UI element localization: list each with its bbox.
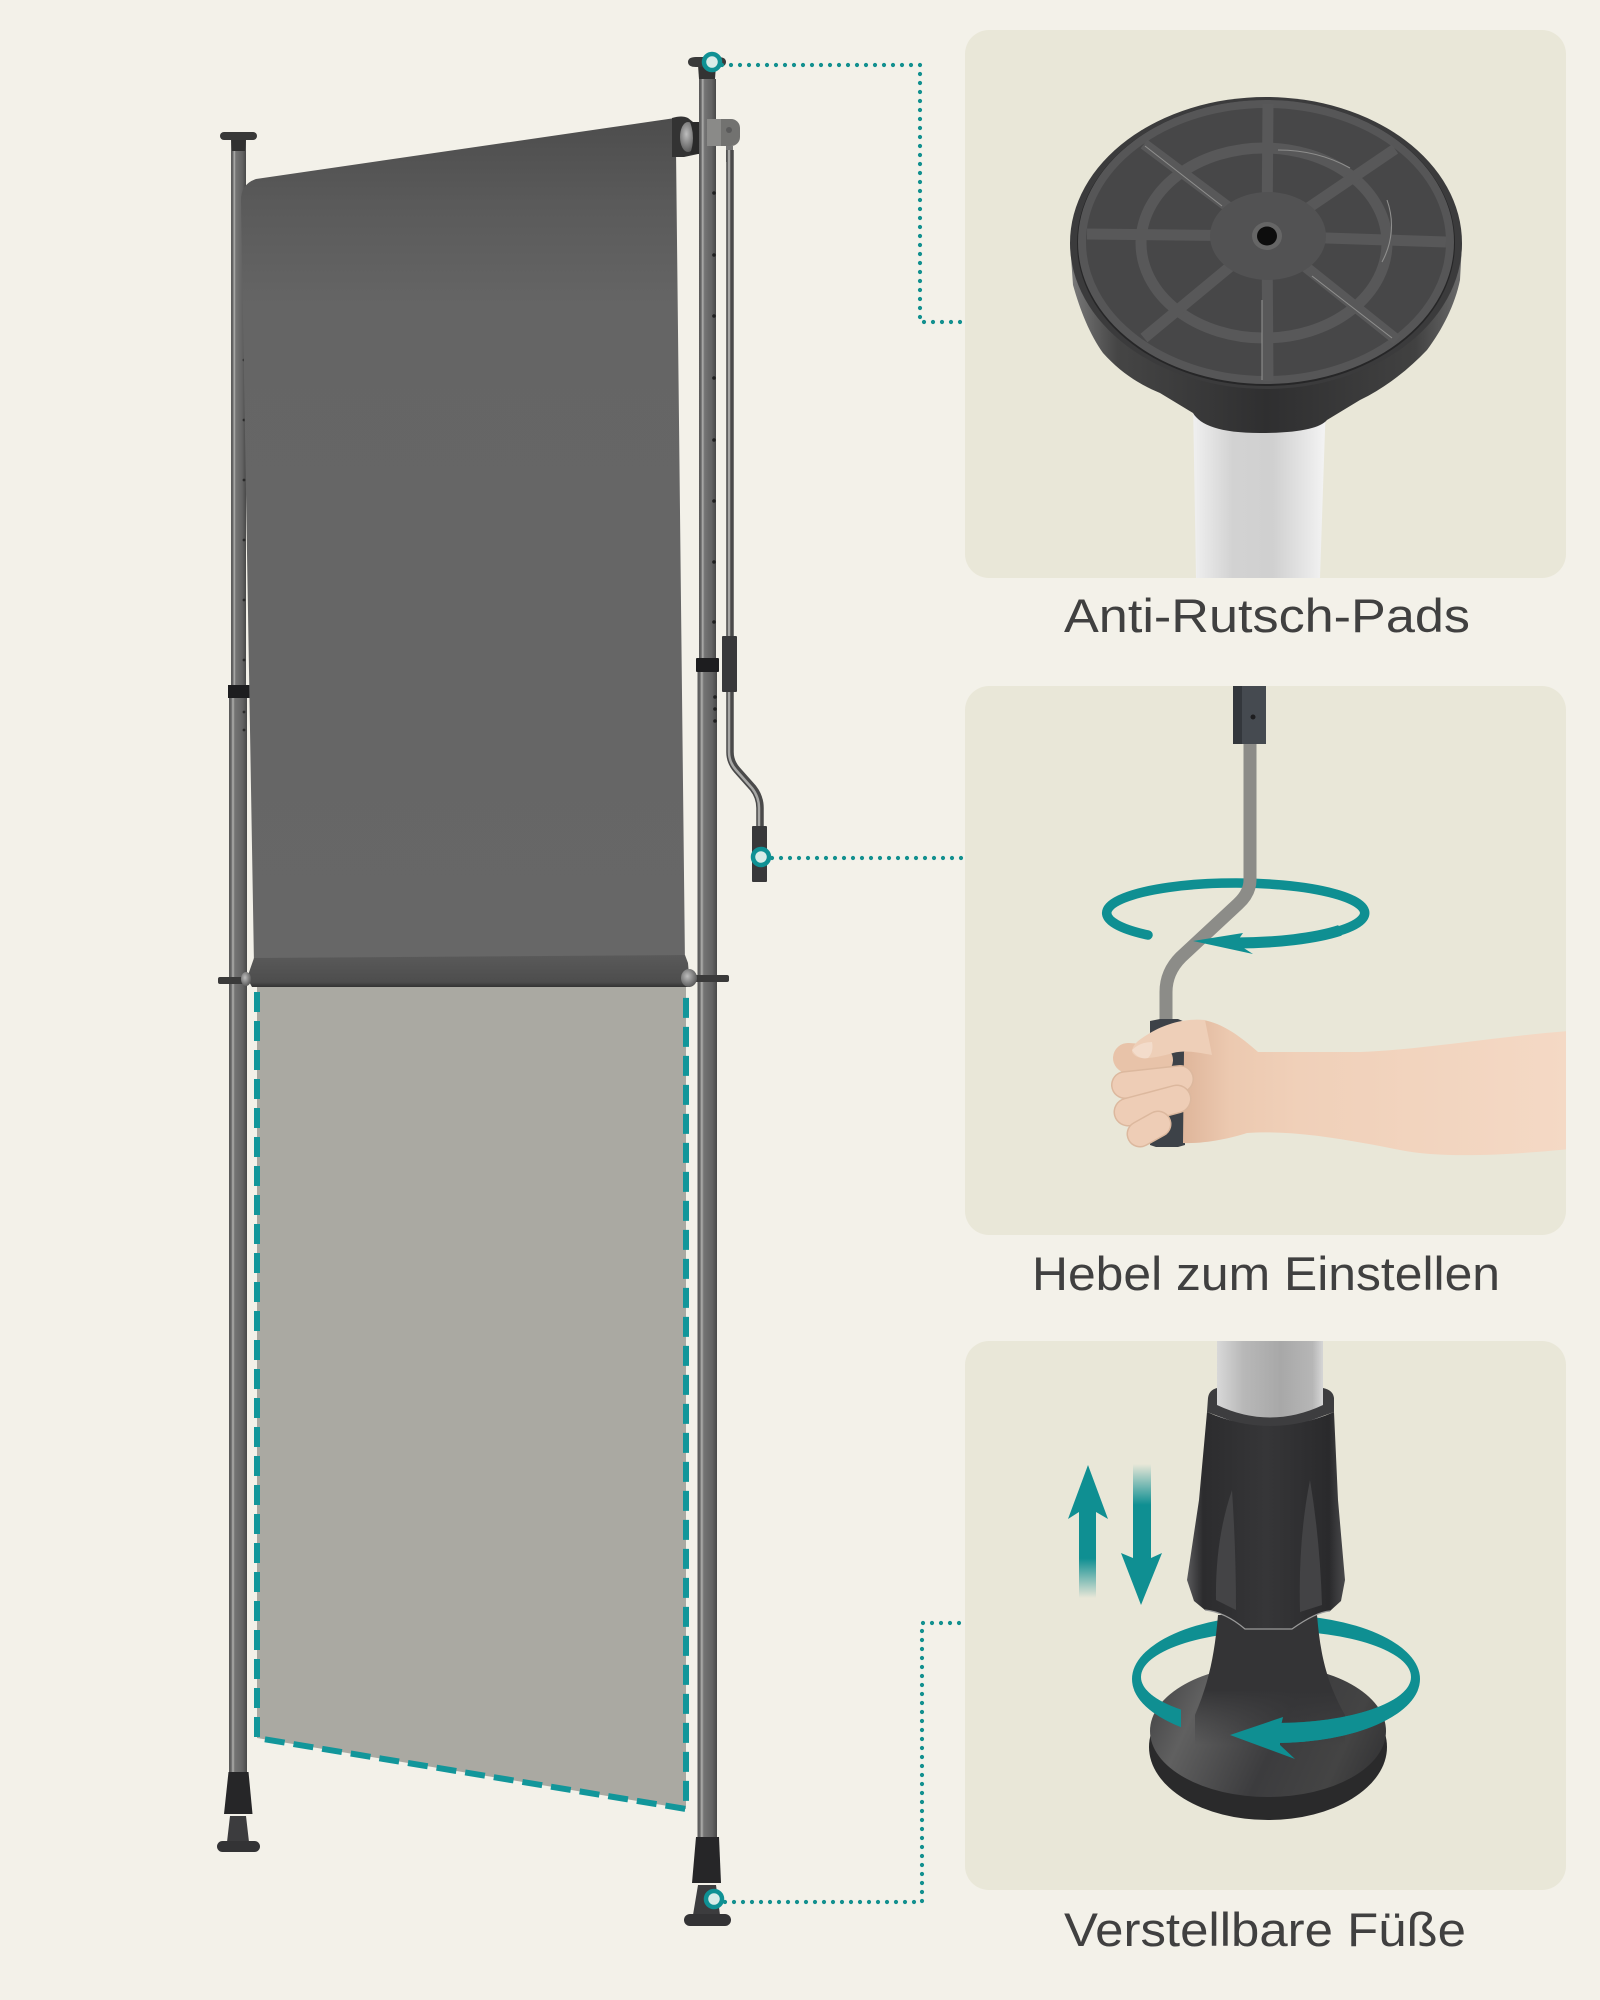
fingers bbox=[1125, 1058, 1180, 1134]
down arrow bbox=[1121, 1464, 1162, 1605]
right foot bbox=[684, 1837, 731, 1926]
left foot bbox=[217, 1772, 260, 1852]
pad face bbox=[1070, 97, 1462, 389]
connector: handle to panel 2 bbox=[772, 856, 963, 860]
label: Anti-Rutsch-Pads: Anti-Rutsch-Pads bbox=[1064, 589, 1470, 642]
label: Verstellbare Füße: Verstellbare Füße bbox=[1064, 1903, 1466, 1956]
label: Hebel zum Einstellen: Hebel zum Einstellen bbox=[1032, 1247, 1500, 1300]
neck and sleeve bbox=[1187, 1341, 1345, 1745]
marker dot: top pad bbox=[704, 54, 720, 70]
right pole bbox=[688, 57, 726, 1840]
rotation arrow: front head bbox=[1193, 930, 1340, 954]
marker dot: handle bbox=[753, 849, 769, 865]
arm and palm bbox=[1183, 1020, 1570, 1155]
panel: anti-slip pads bbox=[965, 30, 1566, 578]
pole tube below pad bbox=[1193, 400, 1326, 578]
panel: adjustment lever bbox=[965, 686, 1570, 1235]
rotation arrow front bbox=[1134, 1690, 1418, 1759]
crank mechanism bbox=[707, 119, 740, 162]
handle grip bbox=[1150, 1019, 1185, 1147]
thumb bbox=[1132, 1020, 1212, 1058]
lever block bbox=[1233, 686, 1266, 744]
connector: top pad to panel 1 bbox=[722, 65, 963, 322]
lever rod bbox=[1166, 744, 1250, 1025]
foot base bbox=[1149, 1665, 1387, 1820]
rotation arrow: back arc bbox=[1107, 883, 1365, 943]
marker dot: foot bbox=[706, 1891, 722, 1907]
roller end cap bbox=[672, 116, 699, 157]
rotation ring bbox=[1132, 1615, 1420, 1743]
crank rod with sleeve and handle bbox=[722, 150, 767, 882]
up arrow bbox=[1068, 1465, 1108, 1598]
grey fabric panel bbox=[241, 117, 685, 965]
panel: adjustable feet bbox=[965, 1341, 1566, 1890]
extended blind area with teal dashed outline bbox=[257, 984, 686, 1809]
connector: foot to panel 3 bbox=[725, 1623, 963, 1902]
left pole bbox=[220, 132, 257, 1776]
product: roller blind on two poles bbox=[217, 57, 767, 1926]
pad body side bbox=[1070, 243, 1462, 433]
pole tube bbox=[1217, 1341, 1323, 1420]
bottom bar of blind bbox=[218, 955, 729, 987]
